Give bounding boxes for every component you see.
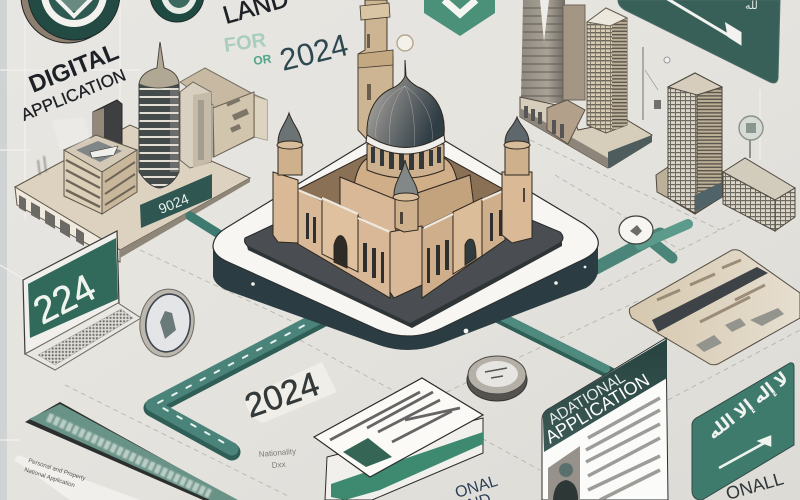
laptop showing 224 [23, 231, 141, 370]
connector: lower-left pipe [152, 316, 322, 452]
small sketch line and icon [643, 47, 670, 120]
document photo [548, 446, 580, 500]
document lines [586, 398, 660, 500]
heading: digital application: APPLICATION [18, 65, 129, 125]
faint small paper sketches [38, 118, 90, 175]
platform lights [251, 266, 586, 333]
dark slab building [93, 100, 122, 156]
flag sword [719, 437, 770, 468]
icon: green check shield [424, 0, 495, 36]
mosque inner courtyard [297, 135, 505, 250]
mosque [273, 60, 532, 298]
green flag card [692, 363, 794, 500]
flag script: لا إله إلا الله [704, 368, 792, 443]
right low building [723, 158, 795, 231]
mosque rotunda base [352, 144, 460, 232]
heading: land for 2024 [220, 0, 352, 78]
connector: top-left pipe [190, 216, 222, 236]
lower-left paper: Personal and Property [27, 458, 86, 482]
icon: small floating circle [397, 35, 413, 51]
national ID card [314, 378, 483, 500]
top right green panel [618, 0, 780, 83]
middle tower [563, 5, 585, 100]
back minaret [358, 0, 393, 145]
mosque inner wall [340, 175, 472, 240]
heading: land for 2024: FOR [223, 29, 268, 57]
right tall building [656, 73, 722, 214]
banner 9024: 9024 [156, 190, 191, 217]
document header [543, 339, 667, 452]
mosque left wall [298, 190, 390, 298]
round stamp coin [467, 356, 527, 401]
dark tray under mosque [244, 165, 563, 328]
lower-left paper: National Application [23, 467, 75, 489]
right corner tower [502, 117, 532, 243]
mosque dome [366, 60, 445, 154]
tower podium [520, 97, 652, 168]
heading: digital application: DIGITAL [25, 38, 123, 99]
heading: land for 2024: OR [252, 52, 273, 68]
left back building [180, 68, 267, 157]
low beige office building [64, 135, 137, 214]
connector: lower-right pipe [492, 312, 610, 373]
floor grid lines [65, 140, 800, 497]
left edge strip [0, 0, 7, 500]
icon: pin node on pipe [619, 216, 653, 244]
right tower group [520, 0, 652, 168]
lower-left form bar [25, 402, 238, 500]
faint caption near tag: Dxx [271, 460, 286, 470]
tag 2024: 2024 [240, 365, 324, 426]
faint caption near tag: Nationality [258, 447, 296, 459]
additional application document [542, 338, 668, 500]
connector: upper-right pipe [596, 224, 688, 268]
laptop showing 224: 224 [27, 267, 103, 333]
left corner tower [273, 113, 303, 243]
left city platform [15, 125, 250, 262]
faint caption near tag [258, 447, 296, 470]
tall dark tower [521, 0, 565, 104]
coin medal [136, 286, 198, 360]
panel sword arrow [666, 0, 740, 43]
icon: large ring badge top left [21, 0, 120, 43]
icon: small ring badge top [150, 0, 204, 22]
passport beige card [629, 250, 800, 365]
heading: digital application [18, 38, 129, 125]
front corner tower [390, 160, 422, 298]
mosque right wall [422, 188, 505, 298]
heading: land for 2024: 2024 [276, 27, 352, 78]
lower-left paper [14, 455, 140, 500]
additional application document: APPLICATION [542, 370, 653, 447]
top right green panel: لله [745, 0, 758, 12]
central platform [213, 130, 598, 350]
platform windows [19, 195, 84, 246]
front tower [587, 8, 627, 133]
left slim building [180, 82, 211, 168]
striped tower with spire [139, 42, 179, 188]
icon: map pin [739, 116, 763, 158]
banner 9024 [140, 174, 212, 228]
additional application document: ADATIONAL [545, 369, 629, 428]
